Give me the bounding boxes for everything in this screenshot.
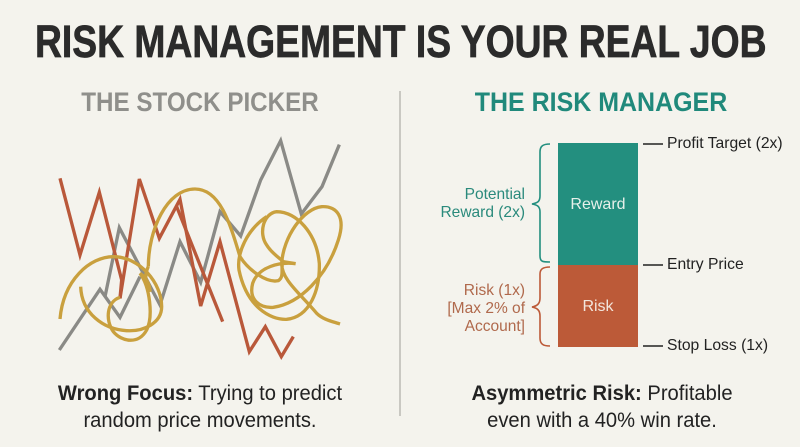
caption: asymmetric risk: even with a 40% win rate. [487, 409, 717, 432]
caption: wrong focus: Wrong Focus: Trying to predict [58, 382, 342, 405]
gray price line [59, 141, 339, 350]
reward bar [558, 143, 638, 265]
risk bar: Risk [582, 298, 614, 315]
caption: wrong focus [58, 382, 342, 432]
red price line [60, 178, 293, 357]
label: risk 1x: [Max 2% of [447, 300, 525, 317]
heading: the stock picker: THE STOCK PICKER [81, 87, 319, 117]
tick lines [643, 144, 663, 346]
yellow scribble lines [60, 189, 341, 340]
label: potential reward: Potential [465, 186, 525, 203]
risk bracket [532, 267, 550, 346]
title: RISK MANAGEMENT IS YOUR REAL JOB [35, 16, 766, 67]
label: entry price: Entry Price [667, 256, 744, 273]
label: risk 1x: Account] [465, 318, 525, 335]
label: potential reward [440, 186, 525, 221]
reward bracket [532, 144, 550, 262]
label: risk 1x: Risk (1x) [464, 282, 525, 299]
caption: asymmetric risk [471, 382, 733, 432]
label: stop loss: Stop Loss (1x) [667, 337, 768, 354]
caption: asymmetric risk: Asymmetric Risk: Profitable [471, 382, 733, 405]
center divider [399, 91, 401, 416]
risk bar [558, 265, 638, 347]
reward bar: Reward [570, 196, 626, 213]
heading: the risk manager: THE RISK MANAGER [475, 87, 727, 117]
label: risk 1x [447, 282, 526, 335]
label: profit target: Profit Target (2x) [667, 135, 783, 152]
label: potential reward: Reward (2x) [440, 204, 525, 221]
caption: wrong focus: random price movements. [83, 409, 317, 432]
